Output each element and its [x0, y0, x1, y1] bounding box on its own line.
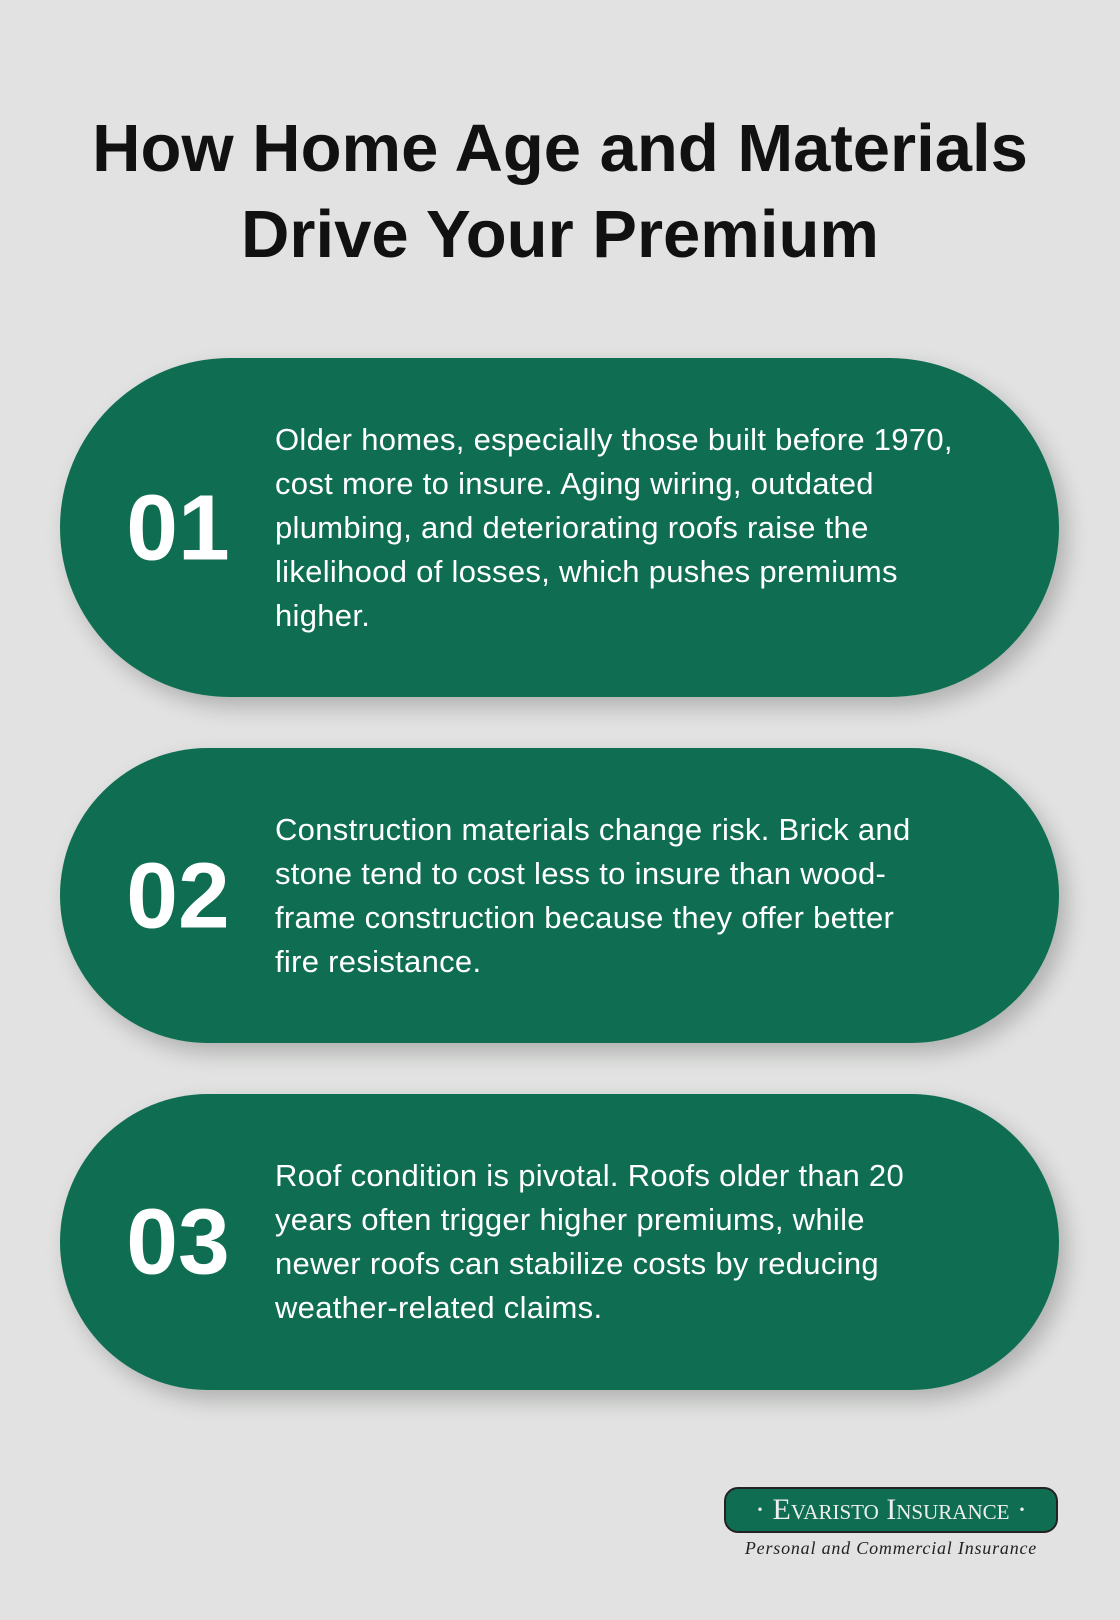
text 03 [275, 1158, 904, 1325]
text 01 [275, 422, 953, 632]
number 01: 01 [126, 475, 230, 579]
logo banner [724, 1487, 1058, 1533]
text 01: likelihood of losses, which pushes premiums [275, 554, 898, 588]
panel: 01 [60, 358, 1059, 697]
text 02: fire resistance. [275, 944, 481, 978]
panel: 03 [60, 1094, 1059, 1390]
logo [724, 1487, 1058, 1558]
panel: 02 [60, 748, 1059, 1043]
number 02: 02 [126, 843, 230, 947]
text 01: plumbing, and deteriorating roofs raise the [275, 510, 869, 544]
title: Drive Your Premium [241, 197, 879, 272]
text 03: Roof condition is pivotal. Roofs older than 20 [275, 1158, 904, 1193]
text 02: frame construction because they offer better [275, 900, 894, 934]
text 03: weather-related claims. [275, 1290, 602, 1325]
text 02: Construction materials change risk. Brick and [275, 812, 910, 846]
text 01: cost more to insure. Aging wiring, outdated [275, 466, 874, 500]
number 03: 03 [126, 1190, 230, 1294]
text 03: years often trigger higher premiums, while [275, 1202, 865, 1237]
text 02: stone tend to cost less to insure than wood- [275, 856, 886, 890]
logo tagline: Personal and Commercial Insurance [745, 1538, 1037, 1558]
text 02 [275, 812, 910, 978]
text 03: newer roofs can stabilize costs by reducing [275, 1246, 879, 1281]
title: How Home Age and Materials [92, 111, 1028, 186]
text 01: higher. [275, 598, 370, 632]
logo banner: · Evaristo Insurance · [755, 1493, 1027, 1526]
text 01: Older homes, especially those built before 1970, [275, 422, 953, 456]
title [92, 111, 1028, 272]
